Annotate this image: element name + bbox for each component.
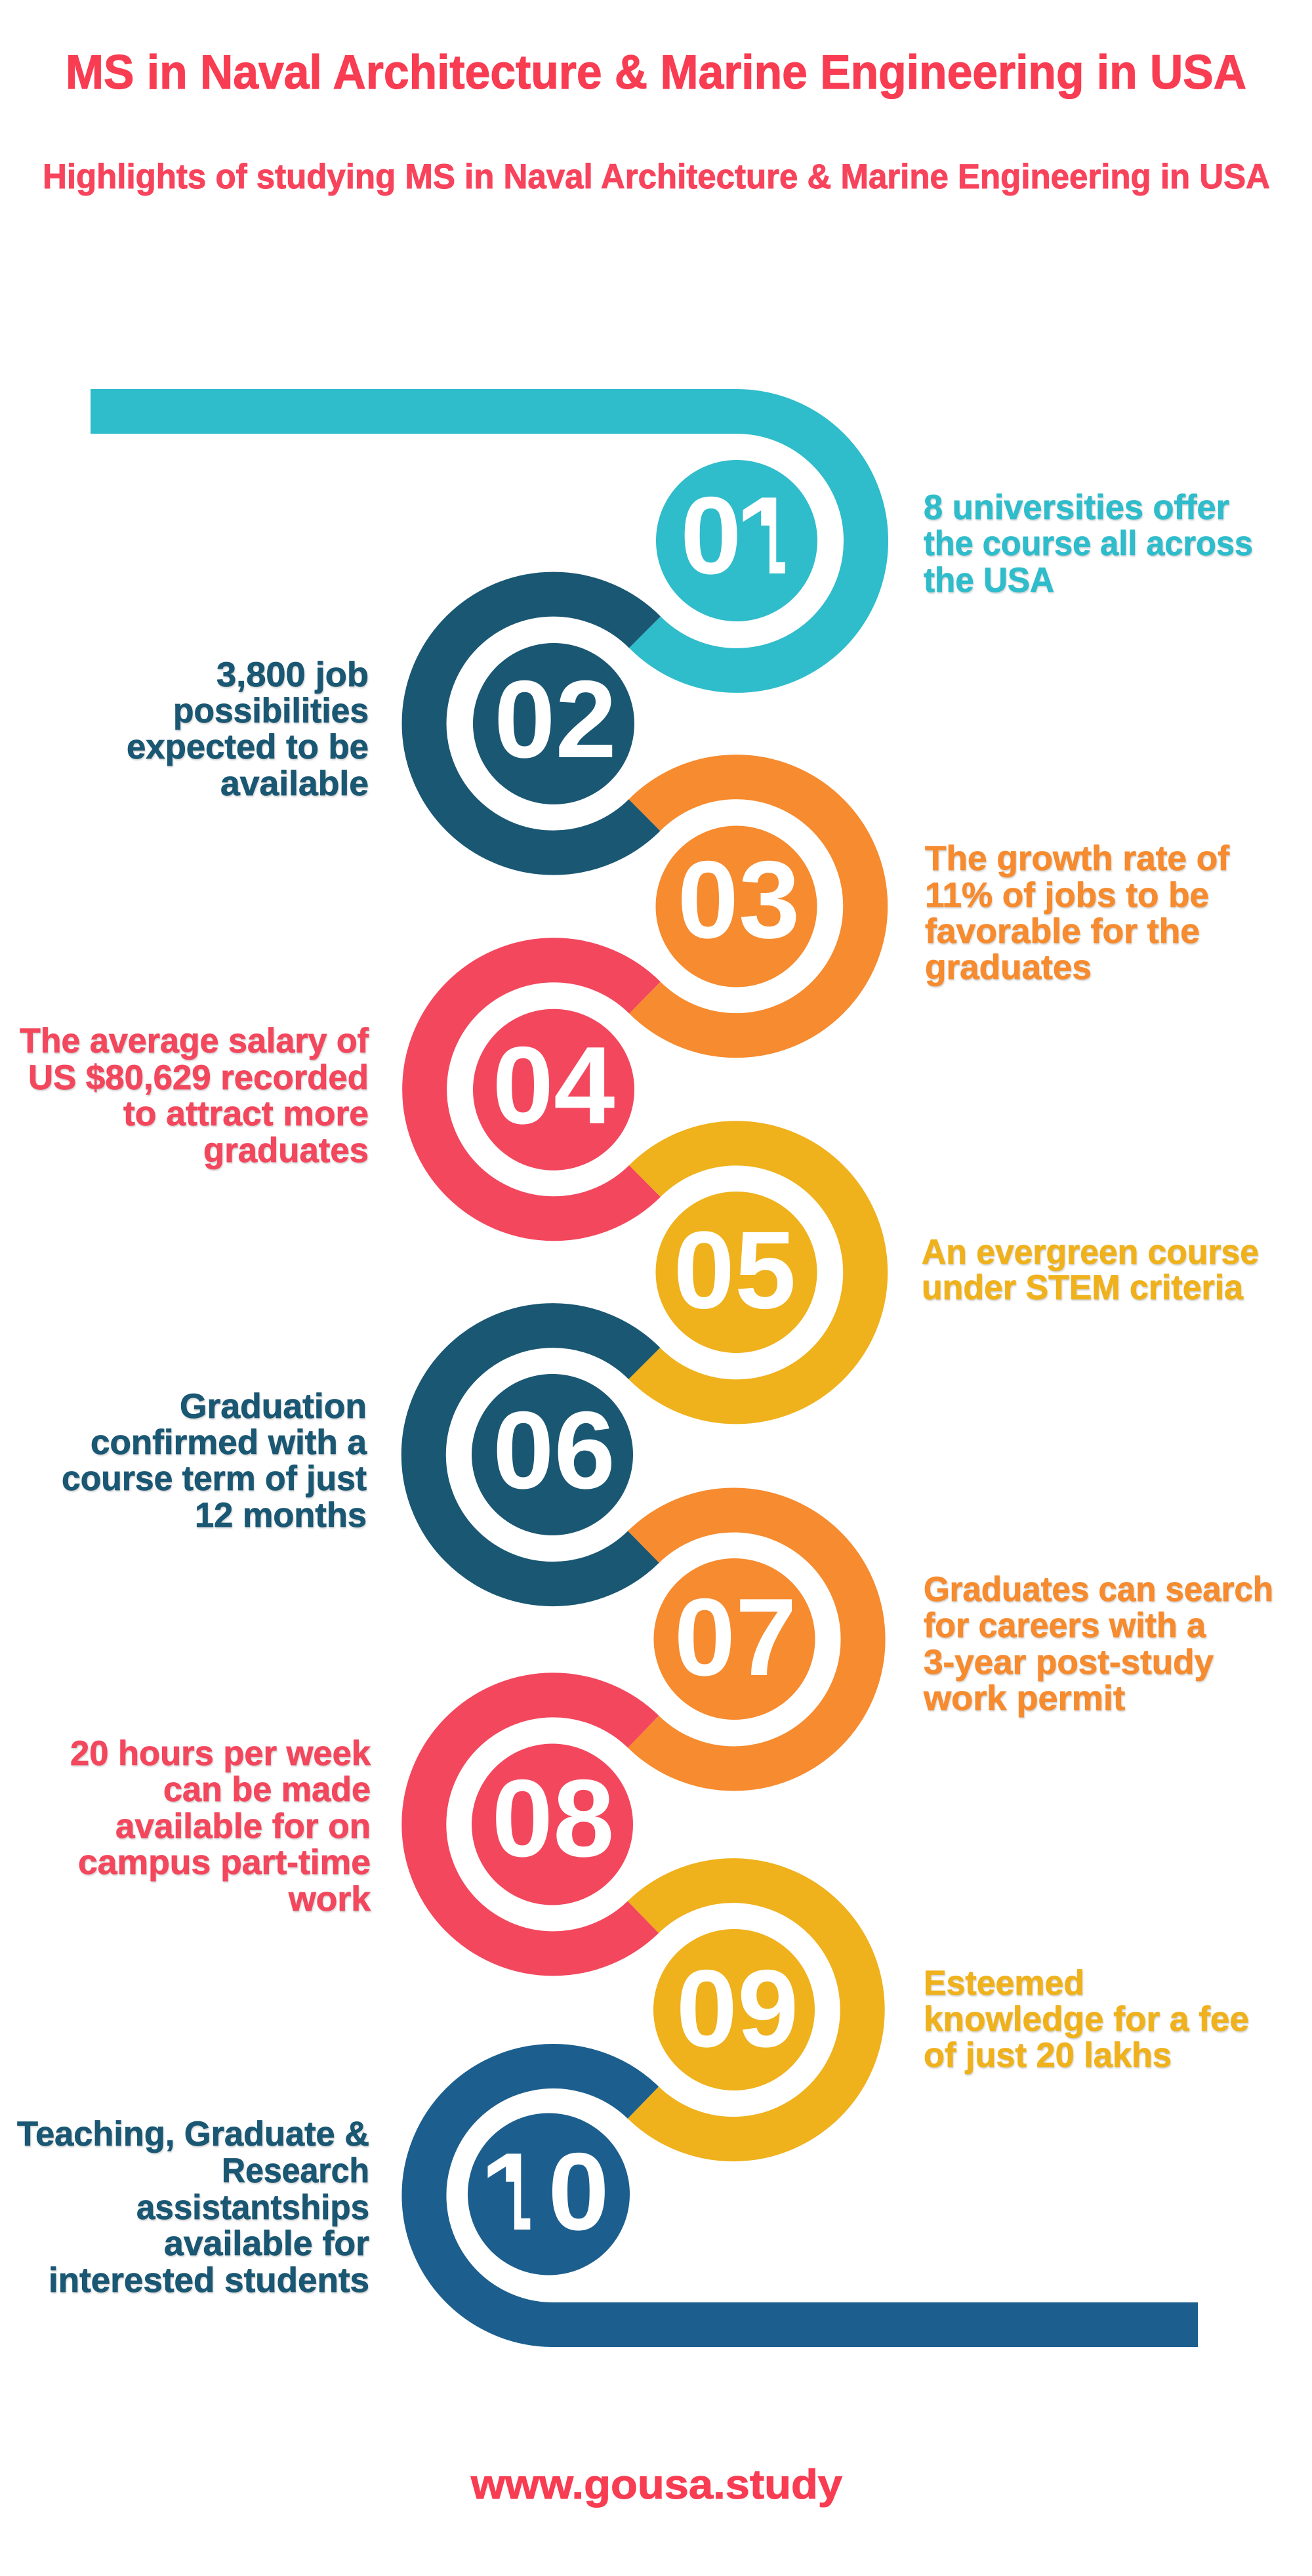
text 06: Graduation (180, 1387, 367, 1426)
number badge 09: 09 (676, 1947, 798, 2070)
text 10: assistantships (136, 2188, 369, 2227)
text 02: expected to be (127, 728, 369, 766)
text 10: Research (222, 2151, 369, 2190)
text 04: The average salary of (20, 1022, 369, 1060)
text 09: knowledge for a fee (924, 2000, 1249, 2039)
text 08: available for on (115, 1807, 371, 1846)
number badge 10: 10 (480, 2130, 609, 2253)
number badge 01: 01 (680, 474, 796, 597)
number badge 07 (653, 1558, 815, 1720)
text 08: work (288, 1880, 371, 1919)
text 09: Esteemed (924, 1964, 1084, 2003)
ring 04 (424, 960, 645, 1218)
text 01 (924, 488, 1253, 600)
text 09: of just 20 lakhs (924, 2036, 1172, 2075)
number badge 08: 08 (492, 1756, 614, 1880)
text 05: under STEM criteria (922, 1268, 1244, 1307)
ring 07 (644, 1510, 863, 1768)
text 07: Graduates can search (924, 1570, 1273, 1609)
text 07: for careers with a (924, 1606, 1206, 1645)
text 03: 11% of jobs to be (925, 876, 1209, 915)
text 10 (17, 2115, 369, 2300)
ring 01 with top bar (91, 411, 866, 671)
number badge 01 (656, 460, 817, 621)
step 01 (91, 411, 1253, 671)
text 03 (925, 839, 1229, 987)
text 01: the course all across (924, 524, 1253, 563)
text 08: 20 hours per week (70, 1734, 371, 1773)
number badge 05 (656, 1192, 817, 1353)
number badge 03 (656, 825, 817, 987)
text 02: possibilities (173, 692, 369, 730)
ring 09 (643, 1880, 863, 2139)
text 06: confirmed with a (91, 1423, 367, 1462)
number badge 10 (468, 2113, 630, 2275)
step 07 (644, 1510, 1273, 1768)
text 04: graduates (203, 1131, 369, 1170)
text 04: US $80,629 recorded (28, 1058, 369, 1097)
step 09 (643, 1880, 1249, 2139)
number badge 04: 04 (493, 1024, 615, 1147)
step 05 (644, 1143, 1259, 1402)
text 03: favorable for the (925, 912, 1200, 951)
number badge 07: 07 (674, 1575, 796, 1699)
text 07: work permit (923, 1679, 1125, 1718)
text 04: to attract more (123, 1094, 369, 1133)
text 01: 8 universities offer (924, 488, 1229, 527)
number badge 02 (473, 643, 634, 804)
text 08: can be made (163, 1770, 371, 1809)
step 10 (17, 2066, 1198, 2325)
text 10: Teaching, Graduate & (17, 2115, 369, 2153)
text 07: 3-year post-study (924, 1643, 1214, 1682)
ring 03 (644, 777, 865, 1035)
text 09 (924, 1964, 1249, 2075)
text 01: the USA (924, 561, 1054, 600)
number badge 06: 06 (493, 1388, 615, 1512)
text 03: The growth rate of (925, 839, 1229, 878)
number badge 09 (653, 1929, 815, 2090)
text 02 (127, 655, 369, 803)
text 06: 12 months (195, 1496, 367, 1535)
text 07 (923, 1570, 1273, 1718)
text 04 (20, 1022, 369, 1170)
number badge 04 (473, 1009, 634, 1171)
ring 05 (644, 1143, 865, 1402)
ring 08 (424, 1695, 644, 1953)
title: MS in Naval Architecture & Marine Engineering in USA (66, 46, 1246, 99)
ring 02 (424, 594, 645, 853)
step 06 (62, 1325, 644, 1584)
step 04 (20, 960, 645, 1218)
step 02 (127, 594, 645, 853)
step 08 (70, 1695, 644, 1953)
text 05: An evergreen course (922, 1233, 1259, 1272)
text 10: available for (164, 2224, 369, 2263)
text 06: course term of just (62, 1459, 367, 1498)
number badge 05: 05 (674, 1209, 796, 1332)
number badge 02: 02 (494, 657, 617, 781)
text 08 (70, 1734, 371, 1919)
number badge 08 (472, 1744, 633, 1905)
text 06 (62, 1387, 367, 1535)
step 03 (644, 777, 1229, 1035)
number badge 03: 03 (678, 838, 800, 961)
footer url: www.gousa.study (470, 2462, 842, 2508)
text 02: 3,800 job (216, 655, 369, 694)
text 02: available (220, 764, 369, 803)
number badge 06 (472, 1374, 633, 1535)
text 03: graduates (925, 948, 1092, 987)
subtitle: Highlights of studying MS in Naval Architecture & Marine Engineering in USA (43, 157, 1270, 196)
text 10: interested students (49, 2261, 369, 2300)
text 08: campus part-time (78, 1843, 371, 1882)
ring 10 with bottom bar (424, 2066, 1198, 2325)
ring 06 (424, 1325, 644, 1584)
text 05 (922, 1233, 1259, 1307)
